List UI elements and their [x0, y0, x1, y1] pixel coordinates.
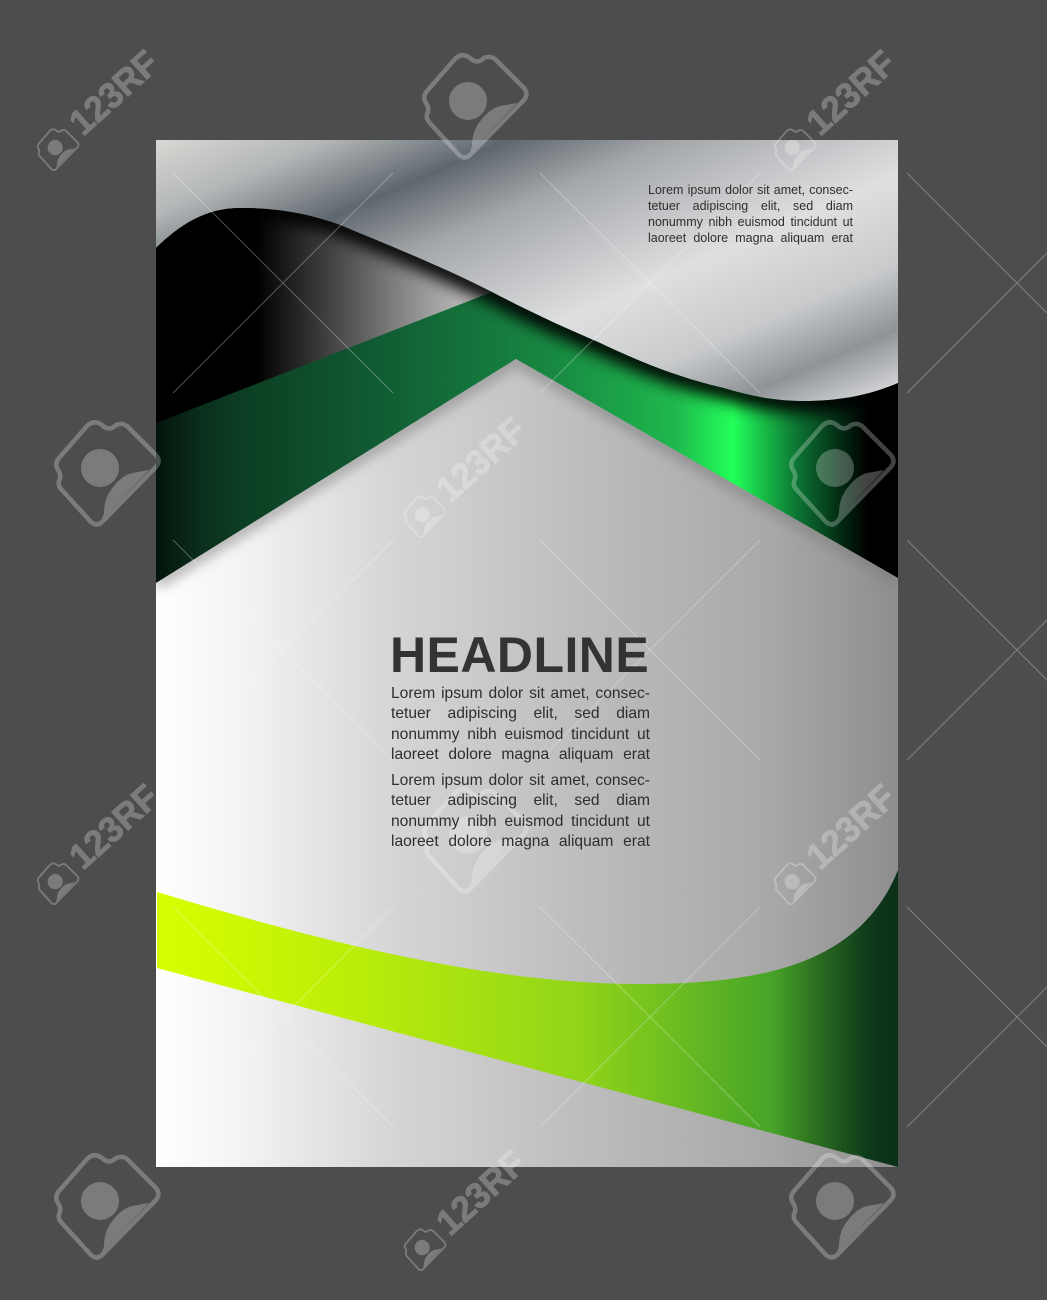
watermark: 123RF logo, centre	[405, 409, 533, 537]
text block: body one: Lorem ipsum dolor sit amet, consec-	[391, 685, 650, 702]
text block: top right: Lorem ipsum dolor sit amet, consec-	[648, 183, 853, 197]
swoosh: lime to green ribbon	[157, 870, 898, 1167]
watermark: 123RF logo, bottom centre: 123RF	[428, 1142, 533, 1243]
text block: top right	[648, 183, 853, 245]
watermark: 123RF logo, bottom centre	[405, 1142, 533, 1270]
panel: gray arrow body	[156, 359, 898, 1167]
watermark: large egg icons	[56, 55, 894, 1258]
heading: HEADLINE	[390, 627, 649, 683]
text block: top right: tetuer adipiscing elit, sed diam	[648, 199, 853, 213]
watermark: 123RF logo, centre: 123RF	[428, 409, 533, 510]
text block: top right: nonummy nibh euismod tincidunt ut	[648, 215, 853, 229]
watermark: 123RF logo, top left: 123RF	[61, 42, 166, 143]
text block: body one: tetuer adipiscing elit, sed diam	[391, 705, 650, 722]
watermark: 123RF logo, lower left	[38, 776, 166, 904]
wave: black and green band	[156, 208, 898, 590]
text block: body two: nonummy nibh euismod tincidunt ut	[391, 813, 650, 830]
watermark: 123RF logo, lower left: 123RF	[61, 776, 166, 877]
text block: body two: tetuer adipiscing elit, sed diam	[391, 792, 650, 809]
text block: body one: laoreet dolore magna aliquam erat	[391, 746, 650, 763]
text block: body one: nonummy nibh euismod tincidunt ut	[391, 726, 650, 743]
watermark: 123RF logo, top right: 123RF	[798, 42, 903, 143]
text block: body one	[391, 685, 650, 763]
watermark: 123RF logo, lower right	[775, 776, 903, 904]
text block: body two	[391, 772, 650, 850]
watermark: 123RF logo, top left	[38, 42, 166, 170]
text block: top right: laoreet dolore magna aliquam erat	[648, 231, 853, 245]
decorative crossing lines	[173, 173, 1047, 1127]
watermark: 123RF logo, top right	[775, 42, 903, 170]
watermark: 123RF logo, lower right: 123RF	[798, 776, 903, 877]
text block: body two: laoreet dolore magna aliquam erat	[391, 833, 650, 850]
panel: metallic background	[156, 140, 898, 1167]
text block: body two: Lorem ipsum dolor sit amet, consec-	[391, 772, 650, 789]
